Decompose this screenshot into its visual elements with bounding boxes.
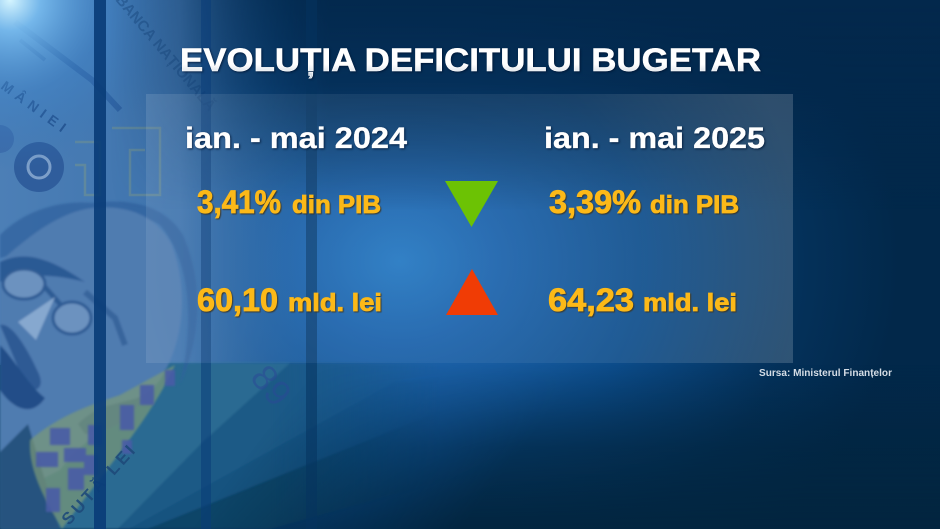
value: 3,39% din PIB: 3,39% bbox=[549, 184, 641, 220]
vertical stripes bbox=[94, 0, 317, 529]
value: 64,23 mld. lei: mld. lei bbox=[643, 289, 737, 317]
denomination: SUTĂ LEI bbox=[58, 442, 139, 529]
icon: red up triangle bbox=[446, 269, 498, 315]
lower note: third sheet bbox=[131, 384, 401, 529]
forehead shadow band bbox=[0, 256, 85, 282]
banknote base tone bbox=[0, 0, 300, 365]
value: 64,23 mld. lei: 64,23 bbox=[548, 282, 634, 318]
title: EVOLUȚIA DEFICITULUI BUGETAR bbox=[180, 42, 761, 78]
lower note: second sheet bbox=[118, 362, 398, 529]
icon: green down triangle bbox=[445, 181, 498, 227]
value: 64,23 mld. lei bbox=[548, 282, 737, 318]
lower note: teal sheet bbox=[0, 363, 300, 529]
glow bbox=[0, 0, 260, 200]
bottom shade bbox=[246, 376, 940, 529]
portrait bbox=[0, 202, 197, 529]
lower note: fourth sheet bbox=[150, 428, 400, 529]
value: 60,10 mld. lei bbox=[197, 282, 382, 318]
nose bbox=[18, 297, 55, 340]
period header: 2024: ian. - mai 2024 bbox=[185, 122, 407, 155]
source: Sursa: Ministerul Finanțelor bbox=[759, 368, 892, 379]
banknote collage bbox=[0, 0, 480, 529]
face bbox=[0, 207, 182, 500]
value: 3,39% din PIB: din PIB bbox=[650, 191, 739, 219]
serial: 89 bbox=[243, 357, 300, 414]
period header: 2025: ian. - mai 2025 bbox=[544, 122, 765, 155]
value: 60,10 mld. lei: 60,10 bbox=[197, 282, 278, 318]
value: 3,41% din PIB: 3,41% bbox=[197, 184, 281, 220]
hair and head outline bbox=[0, 202, 197, 385]
value: 3,41% din PIB: din PIB bbox=[292, 191, 381, 219]
seals bbox=[14, 142, 64, 192]
panel bbox=[146, 94, 793, 363]
value: 3,39% din PIB bbox=[549, 184, 739, 220]
jacket bbox=[0, 424, 60, 529]
value: 3,41% din PIB bbox=[197, 184, 381, 220]
roof lines bbox=[15, 22, 120, 110]
green-yellow pattern bbox=[30, 365, 175, 529]
lower notes bbox=[0, 362, 402, 529]
glasses bbox=[3, 269, 45, 299]
top shade bbox=[127, 0, 768, 198]
ornament bbox=[75, 128, 160, 195]
Romaniei: MÂNIEI bbox=[0, 77, 70, 135]
moustache bbox=[0, 345, 45, 409]
value: 60,10 mld. lei: mld. lei bbox=[288, 289, 382, 317]
